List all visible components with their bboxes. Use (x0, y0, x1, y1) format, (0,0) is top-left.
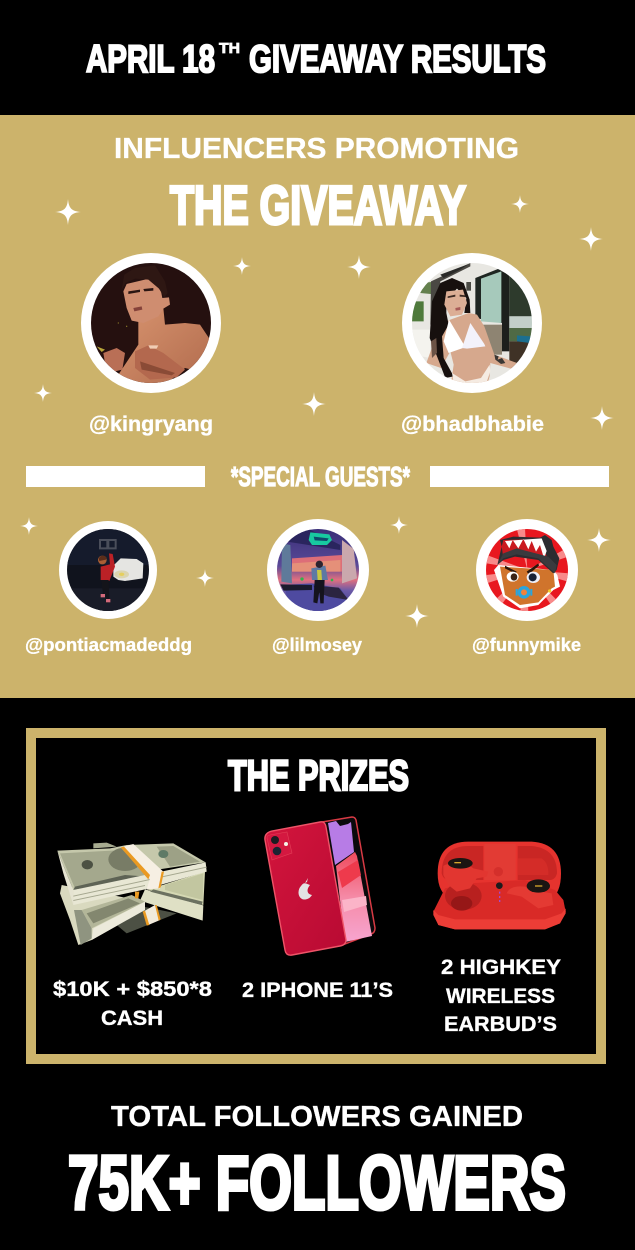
label: earbuds prize: EARBUD’S (444, 1013, 557, 1036)
label: cash prize: CASH (101, 1007, 163, 1030)
avatar: bhadbhabie (402, 253, 542, 393)
sparkle stars (20, 195, 614, 628)
label: earbuds prize (441, 956, 561, 1036)
divider bar left (26, 466, 205, 487)
heading: the giveaway: THE GIVEAWAY (170, 174, 466, 236)
title: TH (219, 40, 240, 57)
image: cash stacks (57, 843, 207, 945)
label: pontiacmadeddg: @pontiacmadeddg (25, 635, 192, 655)
title: APRIL 18 (86, 38, 215, 81)
heading: the prizes: THE PRIZES (228, 752, 409, 800)
label: bhadbhabie: @bhadbhabie (401, 413, 544, 436)
avatar: funnymike (476, 519, 578, 621)
label: iphone prize: 2 IPHONE 11’S (242, 979, 393, 1002)
avatar: kingryang (81, 253, 221, 393)
label: funnymike: @funnymike (472, 635, 581, 655)
label: earbuds prize: WIRELESS (446, 985, 555, 1008)
label: lilmosey: @lilmosey (272, 635, 362, 655)
divider bar right (430, 466, 609, 487)
heading: influencers promoting: INFLUENCERS PROMOTING (114, 133, 519, 165)
avatar: pontiacmadeddg (59, 521, 157, 619)
title (86, 38, 546, 81)
label: kingryang: @kingryang (89, 413, 213, 436)
image: earbuds (433, 842, 566, 929)
avatar: lilmosey (267, 519, 369, 621)
label: earbuds prize: 2 HIGHKEY (441, 956, 561, 979)
label: cash prize (53, 978, 212, 1030)
heading: total followers gained: TOTAL FOLLOWERS GAINED (111, 1101, 523, 1133)
image: iphone (265, 817, 375, 955)
panel: influencers (0, 115, 635, 698)
title: GIVEAWAY RESULTS (249, 38, 546, 81)
label: cash prize: $10K + $850*8 (53, 978, 212, 1001)
panel: prizes (31, 733, 601, 1059)
heading: special guests: *SPECIAL GUESTS* (231, 461, 410, 492)
